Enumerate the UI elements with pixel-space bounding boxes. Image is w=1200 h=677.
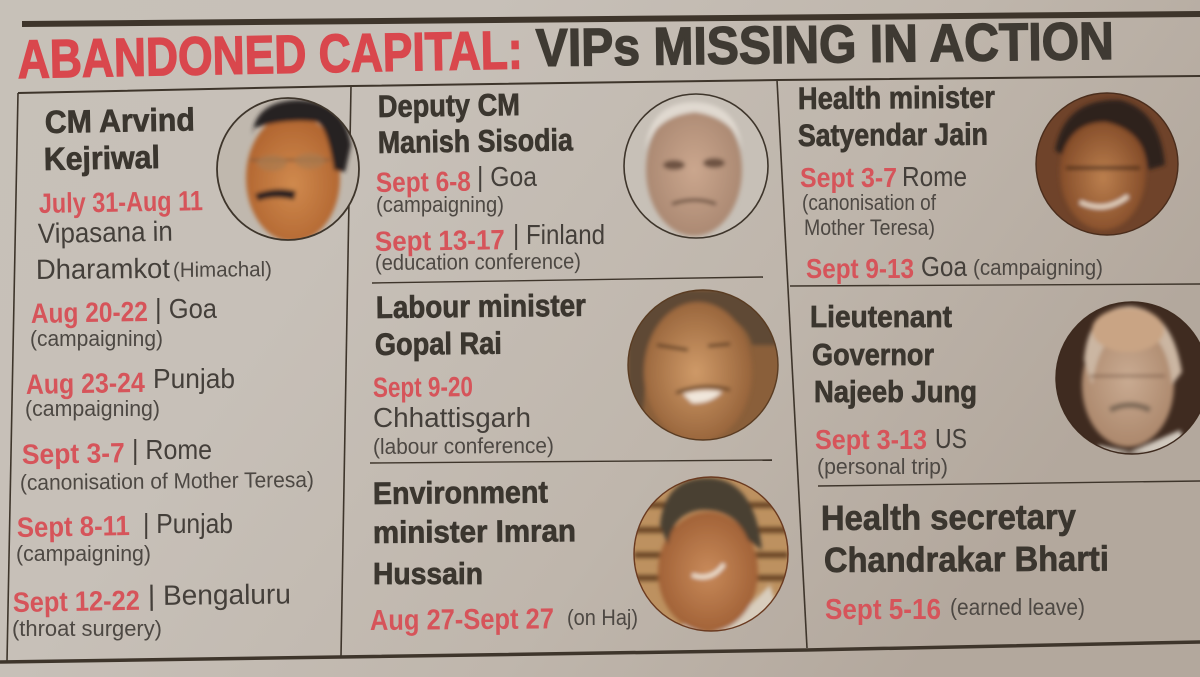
panel: Satyendar Jain <box>798 80 1178 284</box>
entry: Sept 13-17: (education conference) <box>375 249 581 275</box>
entry: July 31: Dharamkot <box>36 253 170 285</box>
panel: Imran Hussain <box>370 474 788 637</box>
title: dark part: VIPs MISSING IN ACTION <box>535 12 1114 78</box>
portrait <box>644 99 767 237</box>
entry: Aug 23-24: Punjab <box>153 363 235 394</box>
entry: Sept 12-22 <box>12 579 291 641</box>
entry: Sept 3-13: Sept 3-13 <box>815 424 927 455</box>
name: Gopal Rai <box>375 326 502 362</box>
name <box>821 498 1109 580</box>
entry: Aug 20-22: (campaigning) <box>30 326 163 351</box>
name: Hussain <box>373 556 483 591</box>
entry: Sept 3-7: (canonisation of Mother Teresa) <box>20 467 314 495</box>
entry: Sept 3-13: US <box>935 423 967 454</box>
entry: Sept 13-17: Sept 13-17 <box>375 224 505 257</box>
name: Kejriwal <box>43 139 160 177</box>
entry: Sept 8-11: (campaigning) <box>16 541 151 566</box>
name <box>375 288 586 362</box>
entry: Sept 12-22: Sept 12-22 <box>13 585 140 618</box>
entry: Sept 6-8: | Goa <box>477 161 537 192</box>
portrait <box>628 290 778 442</box>
name: Health secretary <box>821 498 1077 538</box>
entry: July 31 <box>36 185 272 285</box>
name: Najeeb Jung <box>814 374 977 409</box>
portrait <box>215 96 361 242</box>
entry: Sept 3-7 <box>20 434 314 495</box>
entry: Sept 8-11: Sept 8-11 <box>17 510 130 543</box>
name: Lieutenant <box>810 299 952 334</box>
entry: Sept 13-17 <box>375 219 605 275</box>
portrait <box>634 477 788 632</box>
entry: Sept 5-16: (earned leave) <box>950 594 1085 620</box>
entry: Sept 12-22: | Bengaluru <box>148 579 291 611</box>
name: CM Arvind <box>44 101 195 140</box>
name <box>810 299 977 409</box>
portrait <box>1036 93 1178 235</box>
name <box>798 80 995 153</box>
entry: Sept 5-16: Sept 5-16 <box>825 594 941 626</box>
entry: Sept 3-7: Sept 3-7 <box>800 162 897 193</box>
entry: Sept 3-13: (personal trip) <box>817 454 948 479</box>
portrait ring <box>634 477 788 631</box>
title <box>17 12 1114 90</box>
name <box>43 101 195 177</box>
entry: Sept 9-20: Sept 9-20 <box>373 371 473 403</box>
portrait ring <box>628 290 778 440</box>
top rule <box>22 11 1200 27</box>
entry: Sept 9-13: Sept 9-13 <box>806 253 914 284</box>
panel: Manish Sisodia <box>375 87 768 275</box>
entry: Aug 23-24: (campaigning) <box>25 396 160 421</box>
entry: Sept 3-7: Sept 3-7 <box>22 437 125 470</box>
name <box>378 87 574 160</box>
entry: Sept 6-8: (campaigning) <box>376 192 504 217</box>
entry: Sept 9-20 <box>373 371 554 459</box>
entry: July 31: Vipasana in <box>38 216 173 249</box>
entry: Aug 27-Sept 27: Aug 27-Sept 27 <box>370 603 554 637</box>
name: Environment <box>373 474 548 511</box>
panel: Arvind Kejriwal <box>12 96 361 641</box>
portrait ring <box>1056 302 1200 454</box>
name <box>373 474 576 591</box>
entry: Sept 8-11 <box>16 508 233 566</box>
entry: Sept 9-13: (campaigning) <box>973 255 1103 280</box>
entry: Sept 8-11: | Punjab <box>143 508 233 539</box>
name: Labour minister <box>376 288 586 325</box>
entry: Aug 23-24: Aug 23-24 <box>26 367 145 400</box>
entry: Aug 27-Sept 27: (on Haj) <box>567 605 638 630</box>
portrait ring <box>624 94 768 238</box>
entry: July 31: (Himachal) <box>173 258 272 282</box>
entry: Aug 20-22: Aug 20-22 <box>31 296 148 329</box>
entry: Aug 23-24 <box>25 363 235 421</box>
entry: Sept 3-7: Mother Teresa) <box>804 215 935 240</box>
name: Deputy CM <box>378 87 520 124</box>
entry: Sept 3-7: Rome <box>902 161 967 192</box>
entry: July 31: July 31-Aug 11 <box>39 185 203 219</box>
name: Health minister <box>798 80 995 116</box>
entry: Sept 9-20: Chhattisgarh <box>373 402 531 433</box>
entry: Sept 9-13 <box>806 251 1103 284</box>
entry: Sept 3-13 <box>815 423 967 479</box>
title: red part: ABANDONED CAPITAL: <box>17 20 523 90</box>
panel: Najeeb Jung <box>810 299 1200 479</box>
entry: Sept 9-20: (labour conference) <box>373 433 554 459</box>
name: Satyendar Jain <box>798 117 988 153</box>
portrait ring <box>217 98 359 240</box>
entry: Sept 9-13: Goa <box>921 251 967 282</box>
entry: Aug 20-22: | Goa <box>155 293 217 324</box>
entry: Aug 20-22 <box>30 293 217 351</box>
name: Manish Sisodia <box>378 122 574 160</box>
portrait ring <box>1036 93 1178 235</box>
entry: Sept 3-7: (canonisation of <box>802 190 937 215</box>
portrait <box>1056 302 1200 454</box>
entry: Sept 13-17: | Finland <box>513 219 605 250</box>
entry: Sept 5-16 <box>825 594 1085 626</box>
panel: Chandrakar Bharti <box>821 498 1109 626</box>
entry: Sept 3-7: | Rome <box>132 434 212 465</box>
entry: Sept 3-7 <box>800 161 967 240</box>
name: Chandrakar Bharti <box>824 540 1109 580</box>
name: minister Imran <box>373 513 576 550</box>
panel: Gopal Rai <box>373 288 778 459</box>
entry: Sept 6-8: Sept 6-8 <box>376 166 471 198</box>
entry: Sept 6-8 <box>376 161 537 217</box>
name: Governor <box>812 337 934 372</box>
entry: Sept 12-22: (throat surgery) <box>12 616 162 641</box>
